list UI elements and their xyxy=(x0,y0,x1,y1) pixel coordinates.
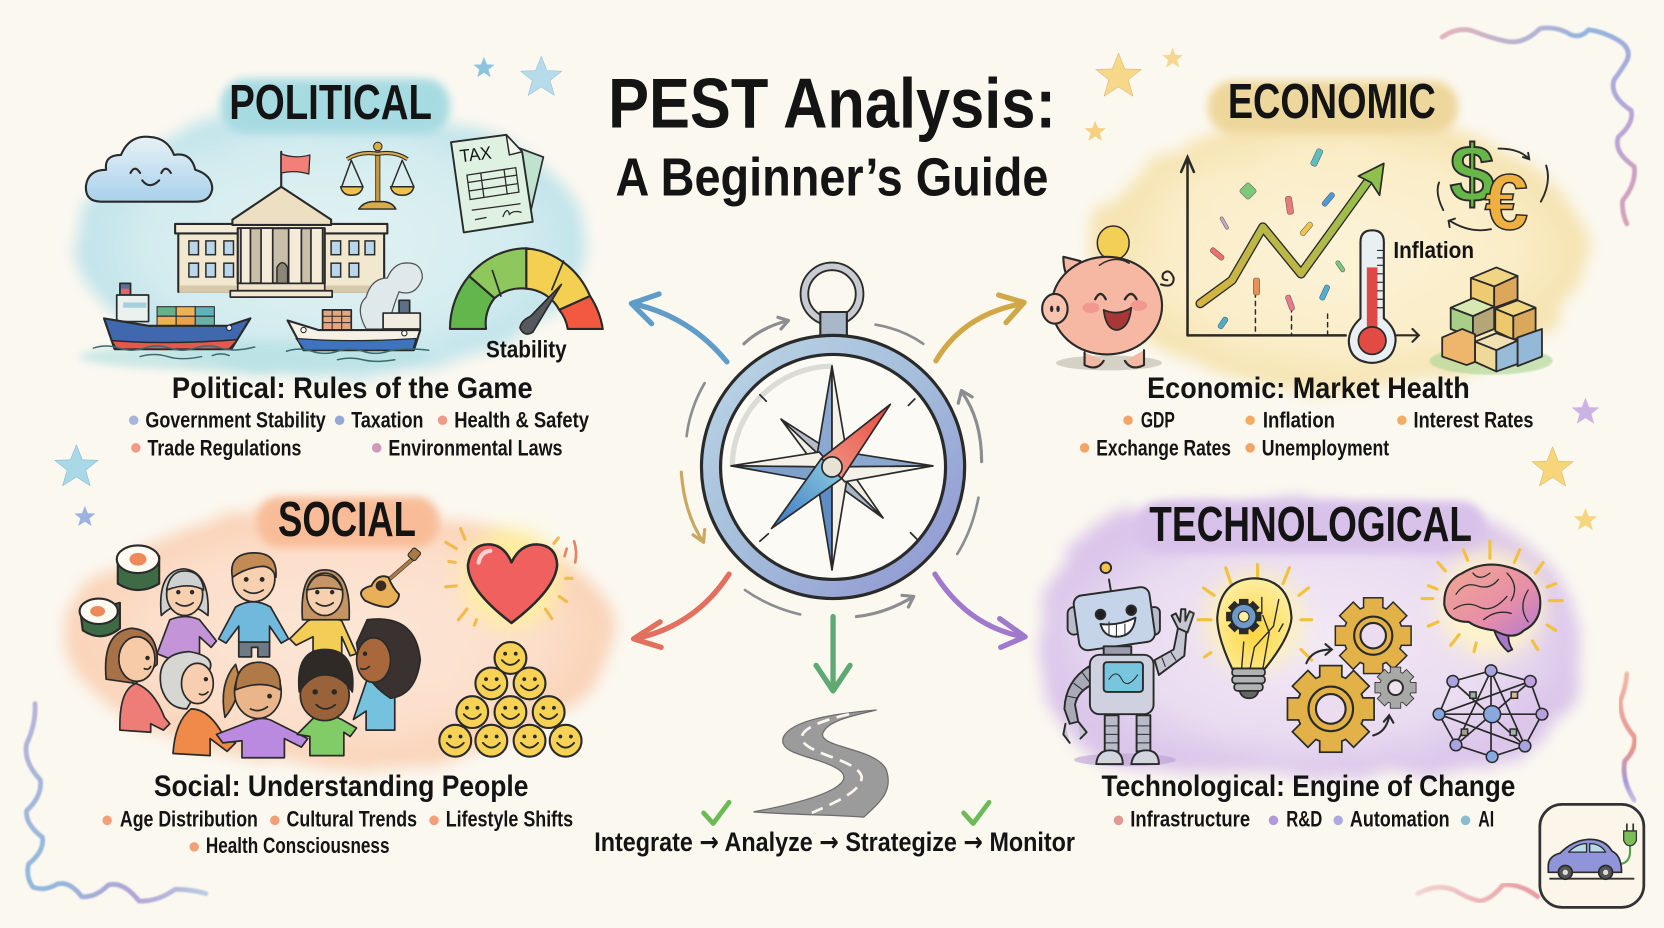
faces xyxy=(144,578,369,711)
political bullet list: Government Stability xyxy=(145,408,326,433)
title: A Beginner’s Guide xyxy=(616,147,1048,207)
arrow: compass to social xyxy=(634,574,729,647)
political bullet list: Trade Regulations xyxy=(148,435,301,460)
technological heading: Technological: Engine of Change xyxy=(1102,770,1515,803)
icon: winding road xyxy=(753,710,888,817)
compass rose xyxy=(731,366,933,570)
icon: guitar xyxy=(361,547,421,607)
icon: stacked blocks xyxy=(1429,267,1553,375)
political bullet list: Taxation xyxy=(351,408,423,433)
icon: sushi rolls xyxy=(80,545,159,636)
front row heads xyxy=(106,619,420,721)
icon: government building xyxy=(175,152,387,297)
technological bullet list xyxy=(1114,807,1494,832)
political heading: Political: Rules of the Game xyxy=(172,372,533,405)
compass xyxy=(701,266,965,599)
icon card: electric car xyxy=(1540,804,1644,907)
political label: POLITICAL xyxy=(229,76,432,130)
title: PEST Analysis: xyxy=(608,64,1056,142)
people holding hands in a circle xyxy=(106,553,420,758)
social bullet list: Lifestyle Shifts xyxy=(446,807,573,832)
icon: currency exchange: $ xyxy=(1450,130,1494,220)
icon: gears xyxy=(1288,599,1416,751)
icon: glowing brain xyxy=(1422,541,1562,658)
social background wash xyxy=(68,507,616,766)
political bullet list: Health & Safety xyxy=(454,408,589,433)
social bullet list: Health Consciousness xyxy=(206,833,389,858)
icon: smiley pyramid xyxy=(439,642,582,757)
icon: network graph xyxy=(1433,665,1548,762)
economic bullet list: Exchange Rates xyxy=(1096,435,1231,460)
icon: thermometer: Inflation xyxy=(1393,237,1474,263)
rotating arrows around compass xyxy=(681,317,982,617)
economic bullet list: Interest Rates xyxy=(1414,408,1533,433)
icon: stability gauge xyxy=(450,248,603,364)
economic bullet list xyxy=(1080,408,1533,460)
technological bullet list: R&D xyxy=(1286,807,1322,832)
economic bullet list: GDP xyxy=(1141,408,1175,433)
icon: stability gauge: Stability xyxy=(486,337,567,364)
compass needle xyxy=(772,404,890,528)
economic label: ECONOMIC xyxy=(1228,75,1436,129)
technological bullet list: Infrastructure xyxy=(1130,807,1250,832)
compass bail xyxy=(804,266,860,336)
arrow: compass to political xyxy=(631,294,727,362)
icon: check marks xyxy=(704,802,989,824)
panel: technological xyxy=(1040,498,1581,832)
technological label: TECHNOLOGICAL xyxy=(1149,498,1472,552)
icon: currency exchange xyxy=(1438,130,1548,246)
icon: glowing heart xyxy=(446,528,576,627)
icon: smiling cloud xyxy=(86,137,212,202)
panel: political xyxy=(76,76,603,460)
arrow: compass to road xyxy=(816,617,850,691)
icon: balance scales xyxy=(341,142,414,209)
panel: economic xyxy=(1042,75,1585,460)
economic background wash xyxy=(1093,115,1585,391)
economic heading: Economic: Market Health xyxy=(1147,372,1470,405)
front row bodies xyxy=(120,678,395,758)
arrow: compass to economic xyxy=(936,295,1024,361)
title xyxy=(608,64,1056,207)
technological background wash xyxy=(1040,502,1581,775)
panel: social xyxy=(68,493,616,858)
icon: idea lightbulb xyxy=(1198,565,1312,698)
social bullet list: Age Distribution xyxy=(120,807,258,832)
technological bullet list: Automation xyxy=(1350,807,1450,832)
icon: currency exchange: € xyxy=(1485,158,1528,246)
back row heads xyxy=(161,553,349,620)
process flow text: Integrate → Analyze → Strategize → Monitor xyxy=(594,827,1075,858)
social bullet list xyxy=(102,807,573,858)
social label: SOCIAL xyxy=(278,493,416,547)
political bullet list: Environmental Laws xyxy=(388,435,562,460)
icon: cargo ship xyxy=(93,283,255,359)
political background wash xyxy=(76,106,586,378)
social heading: Social: Understanding People xyxy=(154,770,528,803)
icon: thermometer xyxy=(1349,230,1474,363)
technological bullet list: AI xyxy=(1478,807,1494,832)
icon: tax document xyxy=(451,135,543,232)
arrow: compass to technological xyxy=(935,574,1025,647)
political bullet list xyxy=(129,408,589,460)
political water wash xyxy=(80,342,430,371)
social bullet list: Cultural Trends xyxy=(287,807,417,832)
icon: piggy bank xyxy=(1042,226,1174,370)
back row bodies xyxy=(157,602,357,660)
icon: tax document: TAX xyxy=(459,143,493,166)
economic bullet list: Inflation xyxy=(1263,408,1335,433)
decorative stars xyxy=(55,48,1599,530)
icon: polluting ship xyxy=(287,263,429,361)
compass ring xyxy=(701,335,965,599)
economic bullet list: Unemployment xyxy=(1262,435,1390,460)
line chart with confetti xyxy=(1181,148,1384,335)
icon: robot xyxy=(1063,562,1194,766)
